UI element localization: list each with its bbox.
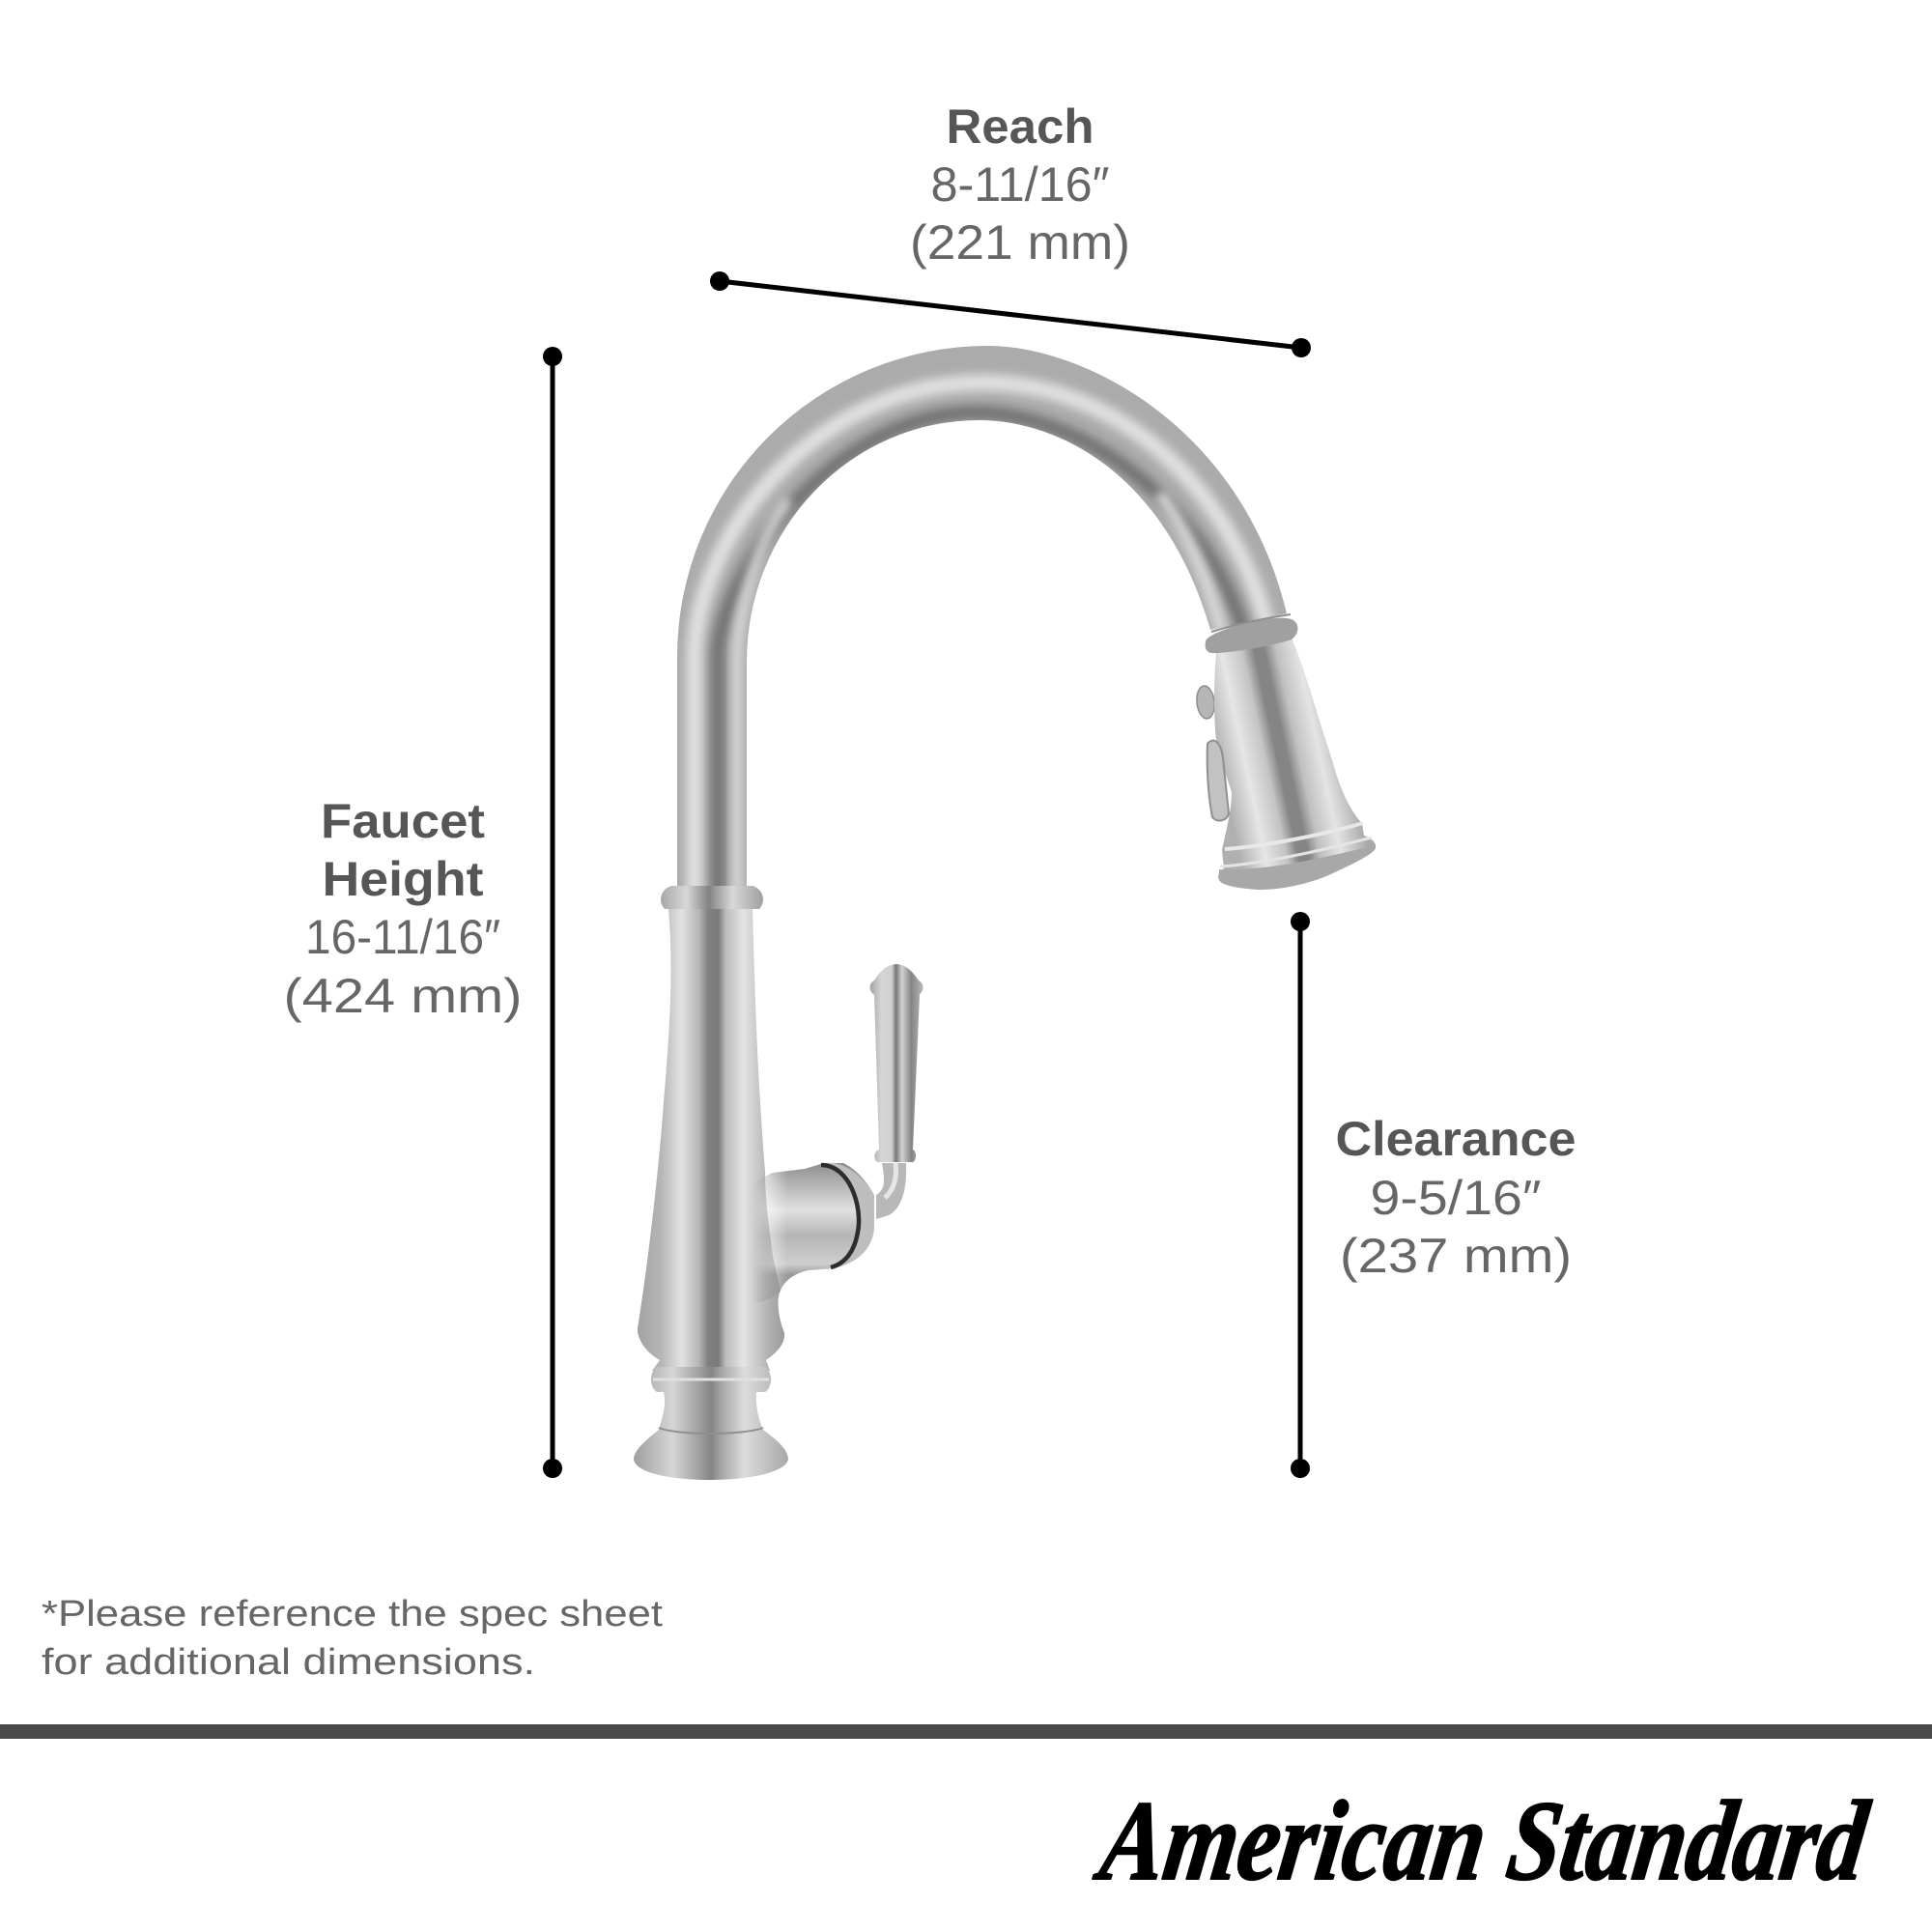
lever handle: [869, 964, 923, 1219]
label: faucet height: Height: [323, 852, 484, 906]
footnote: for additional dimensions.: [42, 1642, 535, 1683]
label: faucet height: [284, 794, 522, 1023]
label: faucet height: 16-11/16″: [305, 910, 500, 964]
label: reach: 8-11/16″: [931, 157, 1109, 212]
footnote: *Please reference the spec sheet: [42, 1594, 664, 1634]
label: clearance: Clearance: [1335, 1112, 1577, 1166]
faucet body: [638, 909, 784, 1371]
footer rule: [0, 1724, 1932, 1739]
label: clearance: (237 mm): [1340, 1229, 1572, 1283]
label: faucet height: (424 mm): [284, 969, 522, 1023]
dimension line: faucet height: [543, 347, 562, 1478]
arm and ring: [757, 1163, 874, 1302]
label: reach: (221 mm): [910, 215, 1130, 270]
label: faucet height: Faucet: [321, 794, 485, 848]
spray head: [1195, 614, 1376, 890]
label: clearance: 9-5/16″: [1370, 1171, 1542, 1225]
footnote: [42, 1594, 664, 1683]
label: clearance: [1335, 1112, 1577, 1283]
label: reach: [910, 99, 1130, 270]
base: [634, 1367, 788, 1480]
spout tube: [667, 338, 1304, 898]
dimension line: reach: [710, 271, 1311, 357]
faucet illustration: [634, 338, 1376, 1480]
dimension line: clearance: [1291, 912, 1310, 1478]
body collar: [661, 886, 763, 909]
label: reach: Reach: [947, 99, 1094, 154]
